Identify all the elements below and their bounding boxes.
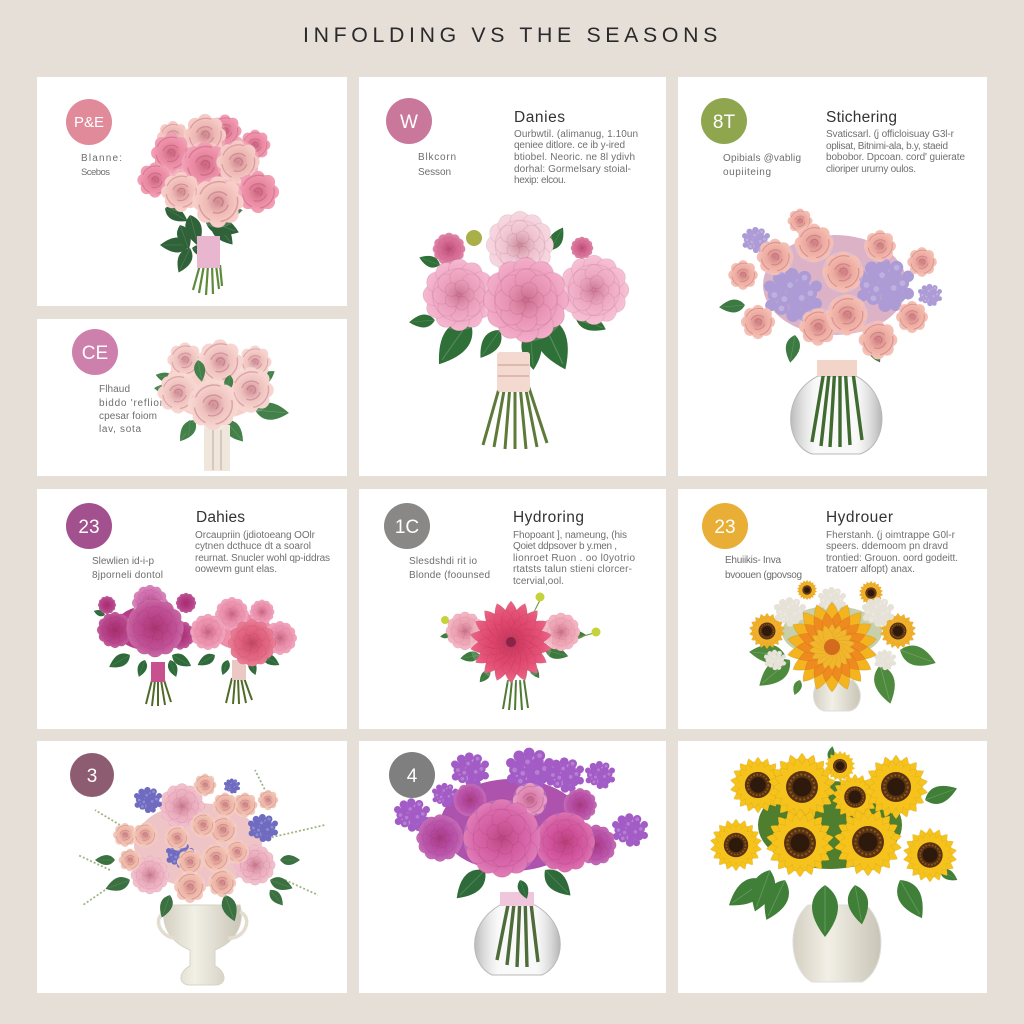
left bouquet [93, 585, 196, 706]
description [99, 384, 164, 435]
description: bobobor. Dpcoan. cord' guierate [826, 152, 965, 163]
badge: 23 [714, 517, 736, 538]
urn arrangement [78, 770, 325, 985]
right bouquet [190, 597, 297, 704]
bloom label: Blonde (foounsed [409, 570, 490, 581]
bouquet [154, 339, 290, 471]
bloom label: Slewlien id-i-p [92, 556, 154, 567]
description: trontied: Grouon. oord godeitt. [826, 553, 958, 564]
description: qeniee ditlore. ce ib y-ired [514, 140, 625, 151]
title: INFOLDING VS THE SEASONS [303, 24, 722, 47]
panel: sunflower vase [678, 741, 987, 993]
description: lav, sota [99, 424, 141, 435]
description: Orcaupriin (jdiotoeang OOlr [195, 530, 316, 541]
panel: pink rose bouquet [37, 77, 347, 306]
description: btiobel. Neoric. ne 8l ydivh [514, 152, 635, 163]
bloom label [418, 152, 456, 178]
panel: cream urn arrangement [37, 741, 347, 993]
badge: 3 [87, 766, 97, 787]
description [514, 129, 638, 186]
badge: 8T [713, 112, 735, 133]
bloom label [725, 555, 802, 581]
badge [702, 503, 748, 549]
card [37, 319, 347, 476]
description [195, 530, 330, 575]
panel: mixed rose vase [678, 77, 987, 476]
card [37, 489, 347, 729]
heading: Danies [514, 109, 565, 126]
panel: peony bouquet [359, 77, 666, 476]
bloom label: Ehuiikis- Inva [725, 555, 781, 566]
badge [70, 753, 114, 797]
season label: Scebos [81, 167, 110, 178]
season label [81, 153, 122, 178]
description: dorhal: Gormelsary stoial- [514, 164, 631, 175]
description: speers. ddemoom pn dravd [826, 541, 948, 552]
badge [389, 752, 435, 798]
bloom label [409, 556, 490, 581]
heading: Hydrouer [826, 509, 893, 526]
card [359, 489, 666, 729]
bloom label [723, 153, 801, 178]
description: cpesar foiom [99, 411, 157, 422]
description: oowevm gunt elas. [195, 564, 277, 575]
description: Qoiet ddpsover b y.men , [513, 541, 617, 552]
bloom label: Opibials @vablig [723, 153, 801, 164]
panel: magenta twin bouquets [37, 489, 347, 729]
description: Fhopoant ], nameung, (his [513, 530, 627, 541]
card [37, 77, 347, 306]
heading: Stichering [826, 109, 897, 126]
card [678, 77, 987, 476]
description: clioriper ururny oulos. [826, 164, 916, 175]
bouquet [440, 592, 600, 710]
bloom label: Blkcorn [418, 152, 456, 163]
badge [384, 503, 430, 549]
vase arrangement [394, 748, 648, 975]
description: reurnat. Snucler wohl qp-iddras [195, 553, 330, 564]
heading: Hydroring [513, 509, 584, 526]
bloom label: Sesson [418, 167, 451, 178]
description [826, 129, 965, 175]
card [359, 77, 666, 476]
badge [66, 99, 112, 145]
panel: pale rose bouquet [37, 319, 347, 476]
vase bouquet [748, 580, 939, 711]
description: biddo 'reflior [99, 398, 164, 409]
description: tratoerr alfopt) anax. [826, 564, 915, 575]
description: Flhaud [99, 384, 130, 395]
bloom label: 8jporneli dontol [92, 570, 163, 581]
badge: CE [82, 343, 108, 364]
card [37, 741, 347, 993]
description: lionroet Ruon . oo l0yotrio [513, 553, 635, 564]
description: oplisat, Bitnimi-ala, b.y, staeid [826, 141, 948, 152]
bloom label: bvoouen (gpovsog [725, 570, 802, 581]
bouquet [409, 211, 629, 449]
bloom label [92, 556, 163, 581]
badge: 23 [78, 517, 100, 538]
badge: 1C [395, 517, 419, 538]
badge [386, 98, 432, 144]
panel: purple peony vase [359, 741, 666, 993]
badge [701, 98, 747, 144]
vase arrangement [709, 746, 960, 982]
card [678, 741, 987, 993]
panel: dahlia bouquet [359, 489, 666, 729]
description: tcervial,ool. [513, 576, 564, 587]
panel: yellow dahlia vase [678, 489, 987, 729]
badge: 4 [407, 766, 418, 787]
description [826, 530, 958, 575]
description: Ourbwtil. (alimanug, 1.10un [514, 129, 638, 140]
badge: W [400, 112, 418, 133]
bloom label: oupiiteing [723, 167, 771, 178]
heading: Dahies [196, 509, 245, 526]
description: cytnen dcthuce dt a soarol [195, 541, 311, 552]
card [678, 489, 987, 729]
season label: Blanne: [81, 153, 122, 164]
card [359, 741, 666, 993]
badge: P&E [74, 114, 104, 131]
description: Fherstanh. (j oimtrappe G0l-r [826, 530, 956, 541]
description: hexip: elcou. [514, 175, 566, 186]
description [513, 530, 635, 587]
bloom label: Slesdshdi rit io [409, 556, 477, 567]
description: rtatsts talun stieni clorcer- [513, 564, 632, 575]
badge [66, 503, 112, 549]
bouquet [137, 114, 279, 295]
description: Svaticsarl. (j officloisuay G3l-r [826, 129, 955, 140]
badge [72, 329, 118, 375]
vase bouquet [719, 208, 942, 454]
